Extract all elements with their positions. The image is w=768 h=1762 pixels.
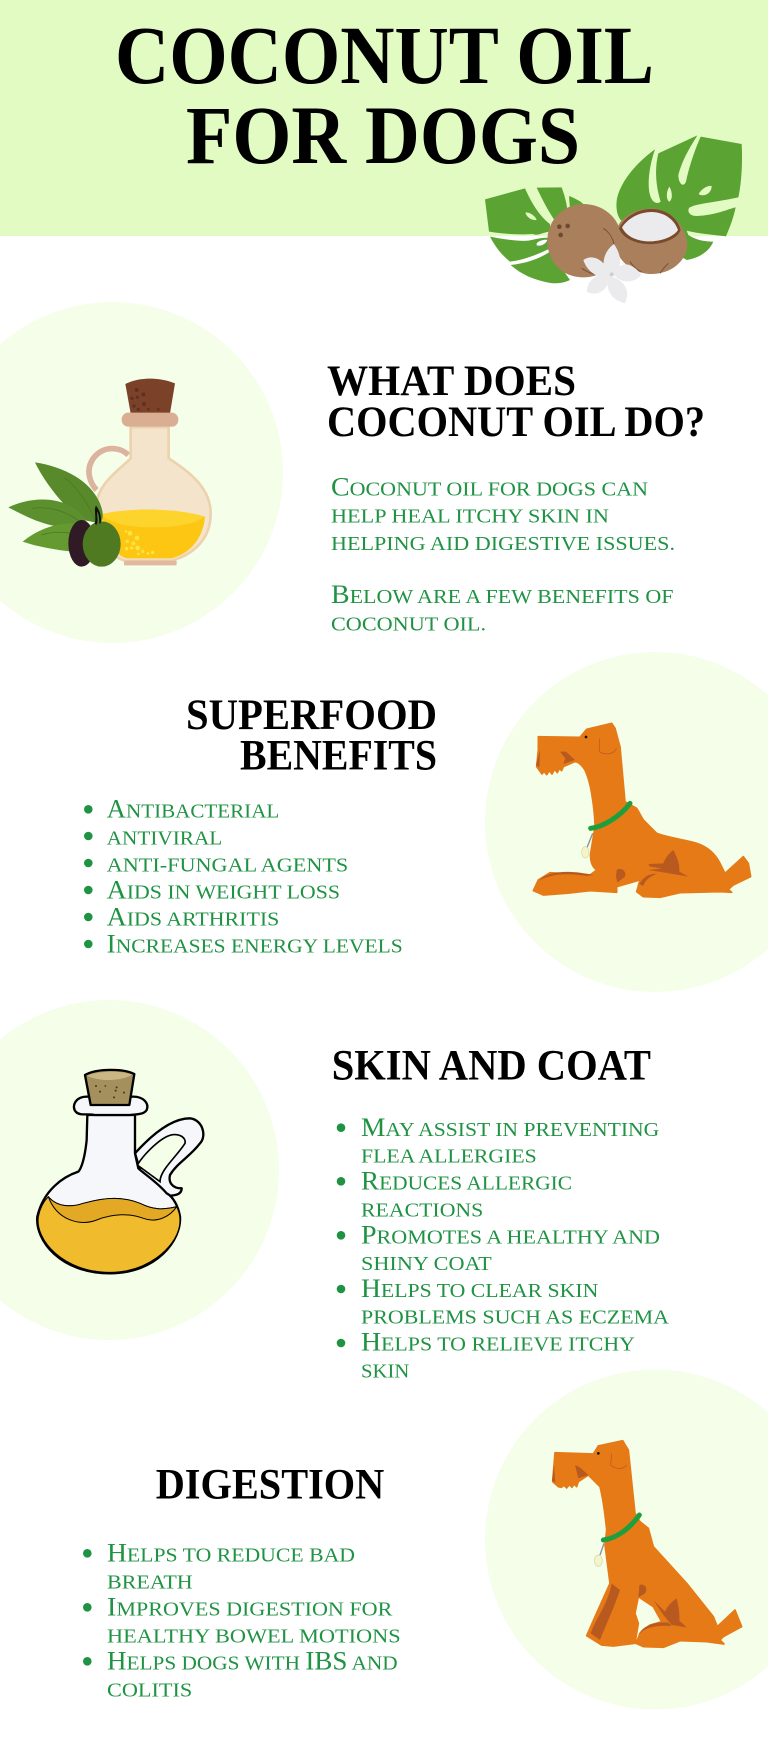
- eye: [585, 736, 587, 738]
- flower: [583, 244, 641, 303]
- cork pores: [95, 1085, 125, 1098]
- benefit list: ANTIVIRAL: [107, 828, 222, 850]
- oil back band: [48, 1197, 177, 1222]
- ear: [599, 738, 617, 754]
- background circle: [0, 1000, 279, 1340]
- skin and coat list: PROBLEMS SUCH AS ECZEMA: [361, 1307, 669, 1329]
- digestion list: COLITIS: [107, 1679, 192, 1701]
- fur shading: [552, 1465, 687, 1640]
- whole coconut: [547, 204, 621, 277]
- jar body: [95, 427, 211, 561]
- benefit list: ANTI-FUNGAL AGENTS: [107, 855, 348, 877]
- benefit list: [84, 795, 403, 958]
- background circle: [485, 652, 768, 992]
- monstera leaf right: [616, 135, 742, 260]
- skin and coat list: HELPS TO RELIEVE ITCHY: [361, 1328, 635, 1357]
- background circle: [0, 302, 283, 643]
- digestion list: BREATH: [107, 1572, 193, 1594]
- benefit list: AIDS ARTHRITIS: [107, 902, 279, 931]
- skin and coat list: [337, 1113, 669, 1382]
- icon: coconuts with monstera leaves: [485, 135, 742, 303]
- digestion list: HEALTHY BOWEL MOTIONS: [107, 1625, 401, 1647]
- cork pores: [130, 388, 160, 411]
- body text: BELOW ARE A FEW BENEFITS OF: [331, 580, 674, 609]
- heading: SUPERFOOD: [186, 692, 437, 739]
- cork top: [87, 1072, 133, 1080]
- skin and coat list: PROMOTES A HEALTHY AND: [361, 1220, 660, 1249]
- collar: [591, 803, 630, 828]
- title: [115, 9, 654, 181]
- cork: [125, 379, 175, 413]
- panel: superfood benefits: [84, 652, 768, 992]
- skin and coat list: SKIN: [361, 1360, 409, 1382]
- cork: [85, 1070, 134, 1105]
- body text: HELP HEAL ITCHY SKIN IN: [331, 506, 609, 528]
- dog body: [533, 723, 751, 897]
- heading: COCONUT OIL DO?: [327, 399, 705, 446]
- heading: DIGESTION: [156, 1462, 384, 1509]
- skin and coat list: MAY ASSIST IN PREVENTING: [361, 1113, 660, 1142]
- panel: what does coconut oil do: [0, 302, 705, 643]
- fur shading: [536, 750, 688, 886]
- leaves: [8, 462, 103, 552]
- heading: SKIN AND COAT: [332, 1042, 651, 1089]
- body text: COCONUT OIL FOR DOGS CAN: [331, 473, 648, 502]
- collar: [603, 1515, 639, 1540]
- heading: WHAT DOES: [327, 358, 576, 405]
- title: FOR DOGS: [186, 89, 580, 181]
- background circle: [485, 1370, 768, 1710]
- half coconut: [616, 208, 687, 274]
- tag: [582, 833, 593, 858]
- benefit list: ANTIBACTERIAL: [107, 795, 279, 824]
- panel: skin and coat: [0, 1000, 669, 1382]
- heading: BENEFITS: [240, 732, 437, 779]
- skin and coat list: HELPS TO CLEAR SKIN: [361, 1274, 599, 1303]
- skin and coat list: FLEA ALLERGIES: [361, 1146, 537, 1168]
- benefit list: AIDS IN WEIGHT LOSS: [107, 875, 340, 904]
- benefit list: INCREASES ENERGY LEVELS: [107, 929, 403, 958]
- heading: [327, 358, 705, 446]
- body text: COCONUT OIL.: [331, 614, 486, 636]
- digestion list: HELPS DOGS WITH IBS AND: [107, 1646, 398, 1675]
- jar foot: [124, 561, 177, 565]
- icon: sitting dog: [552, 1441, 742, 1647]
- digestion list: IMPROVES DIGESTION FOR: [107, 1593, 393, 1622]
- oil: [102, 510, 205, 558]
- bubbles: [125, 530, 154, 555]
- ear: [611, 1453, 627, 1469]
- oil: [38, 1197, 180, 1272]
- title: COCONUT OIL: [115, 9, 654, 101]
- eye: [597, 1452, 600, 1455]
- digestion list: HELPS TO REDUCE BAD: [107, 1539, 355, 1568]
- handle: [135, 1118, 203, 1196]
- icon: oil cruet: [37, 1070, 203, 1273]
- panel: digestion: [83, 1370, 768, 1710]
- dog body: [553, 1441, 742, 1647]
- bottle: [37, 1115, 180, 1273]
- icon: lying dog: [533, 723, 751, 897]
- handle opening: [137, 1135, 185, 1182]
- rim: [74, 1097, 147, 1115]
- olives: [68, 506, 121, 567]
- header band: [0, 0, 768, 236]
- body text: HELPING AID DIGESTIVE ISSUES.: [331, 533, 675, 555]
- skin and coat list: REDUCES ALLERGIC: [361, 1167, 572, 1196]
- skin and coat list: REACTIONS: [361, 1199, 483, 1221]
- collar ring: [122, 413, 178, 427]
- heading: [186, 692, 437, 779]
- icon: oil jar with olives: [8, 379, 211, 567]
- tag: [594, 1543, 604, 1566]
- skin and coat list: SHINY COAT: [361, 1253, 492, 1275]
- oil surface: [102, 510, 205, 527]
- digestion list: [83, 1539, 401, 1701]
- jar handle: [89, 449, 128, 490]
- monstera leaf left: [485, 187, 584, 283]
- body text: [331, 473, 675, 636]
